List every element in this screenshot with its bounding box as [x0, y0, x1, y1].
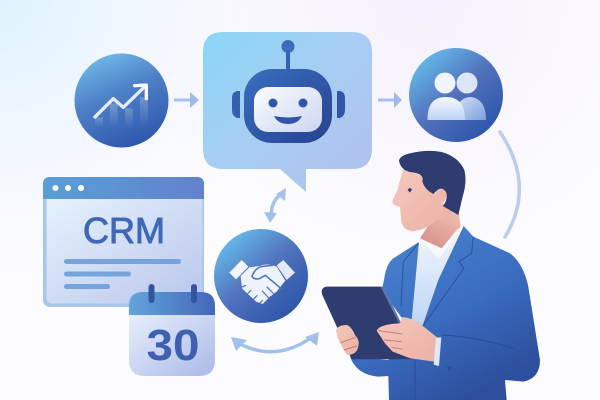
- jacket body: [350, 226, 540, 400]
- person: businessman with tablet: [322, 151, 540, 400]
- panel: robot speech bubble: [203, 32, 372, 192]
- arrow: robot to handshake double curve: [264, 188, 286, 223]
- arrow: curved link customers to person: [500, 132, 519, 237]
- arrow: handshake to person double curve: [231, 332, 319, 352]
- collar: [420, 225, 464, 259]
- face: [392, 168, 457, 231]
- panel: CRM window: [43, 177, 204, 307]
- lapel lines: [401, 237, 473, 330]
- arrow: robot to customers: [378, 92, 402, 108]
- cuff button: [447, 367, 452, 371]
- icon: robot: [232, 40, 345, 143]
- shirt cuff: [434, 337, 441, 366]
- icon: customers circle: [409, 48, 503, 142]
- icon: calendar 30: [129, 284, 215, 376]
- tablet: [322, 287, 413, 359]
- text: 30: 30: [146, 321, 200, 370]
- eye: [408, 188, 412, 193]
- shirt: [412, 226, 467, 327]
- heading: CRM: CRM: [83, 210, 165, 251]
- right hand: [377, 317, 438, 362]
- left hand: [336, 325, 359, 355]
- icon: growth chart circle: [74, 54, 168, 148]
- icon: handshake circle: [214, 229, 308, 323]
- ear: [435, 188, 447, 204]
- neck: [420, 208, 461, 248]
- arrow: chart to robot: [174, 92, 199, 108]
- hair: [399, 151, 465, 215]
